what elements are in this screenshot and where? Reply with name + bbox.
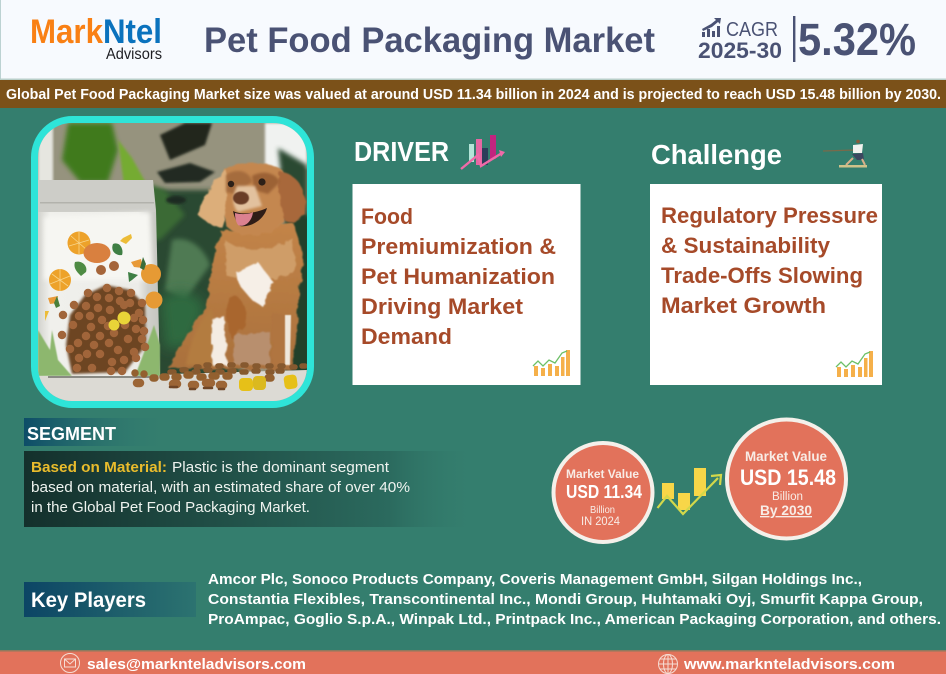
icon: email <box>60 654 80 672</box>
logo: MarkNtel Advisors: Advisors <box>106 46 162 63</box>
title: Pet Food Packaging Market <box>204 21 655 60</box>
CAGR block: 5.32% <box>798 14 916 65</box>
segment panel <box>24 451 480 527</box>
challenge text: Trade-Offs Slowing <box>661 263 863 288</box>
market value 2030 circle: USD 15.48 <box>740 465 836 490</box>
market value 2030 circle: Market Value <box>745 449 827 464</box>
market value 2030 circle <box>727 420 846 538</box>
summary band <box>0 80 946 108</box>
market value 2024 circle <box>554 443 652 542</box>
market value 2030 circle: By 2030 <box>760 503 812 518</box>
driver text: Driving Market <box>361 294 524 319</box>
logo: MarkNtel Advisors: MarkNtel <box>30 13 162 51</box>
key players list: ProAmpac, Goglio S.p.A., Winpak Ltd., Printpack Inc., American Packaging Corporation, and others. <box>208 612 941 628</box>
driver text: Premiumization & <box>361 234 556 259</box>
challenge text: Regulatory Pressure <box>661 203 878 228</box>
challenge text <box>661 203 878 318</box>
icon: tug of war figure <box>823 140 867 168</box>
key players list <box>208 572 941 628</box>
key players label <box>24 582 196 617</box>
key players list: Constantia Flexibles, Transcontinental Inc., Mondi Group, Huhtamaki Oyj, Smurfit Kappa Group, <box>208 592 923 608</box>
CAGR block: CAGR <box>726 19 778 41</box>
icon: growth bars <box>702 18 721 37</box>
CAGR block <box>698 14 916 65</box>
table and scattered kibble <box>38 365 307 401</box>
icon: driver growth bars with arrow <box>461 135 505 169</box>
segment panel: Based on Material: <box>31 459 167 476</box>
segment heading: SEGMENT <box>27 423 117 444</box>
challenge text: & Sustainability <box>661 233 831 258</box>
dog <box>168 162 306 370</box>
segment heading <box>24 418 174 446</box>
blurred room backdrop <box>38 123 311 401</box>
market value 2024 circle: IN 2024 <box>581 516 621 528</box>
footer bar: sales@marknteladvisors.com <box>87 656 306 673</box>
driver text: Food <box>361 204 413 229</box>
market value 2024 circle: USD 11.34 <box>566 482 642 502</box>
heading: DRIVER: DRIVER <box>354 136 449 167</box>
market value 2024 circle: Market Value <box>566 467 639 481</box>
market value 2024 circle: Billion <box>590 504 615 516</box>
driver text <box>361 204 556 349</box>
kibble inside bag <box>66 285 146 374</box>
segment panel: in the Global Pet Food Packaging Market. <box>31 499 310 516</box>
driver text: Pet Humanization <box>361 264 555 289</box>
market value 2030 circle: Billion <box>772 491 803 503</box>
panel: driver <box>352 184 580 385</box>
segment panel: Plastic is the dominant segment <box>172 459 390 476</box>
growth arrow with bars <box>658 468 721 514</box>
icon: small growth chart <box>836 351 873 377</box>
driver text: Demand <box>361 324 452 349</box>
summary band: Global Pet Food Packaging Market size was valued at around USD 11.34 billion in 2024 and is projected to reach USD 15.48 billion by 2030. <box>6 87 941 103</box>
pet food bag <box>38 180 162 376</box>
CAGR block: 2025-30 <box>698 38 782 63</box>
footer bar <box>0 650 946 674</box>
photo: dog beside pet food bag <box>34 120 311 404</box>
panel: challenge <box>650 184 882 385</box>
heading: Challenge: Challenge <box>651 139 782 170</box>
header bar <box>0 0 946 80</box>
icon: small growth chart <box>533 350 570 376</box>
icon: globe <box>658 654 678 674</box>
footer bar: www.marknteladvisors.com <box>683 656 895 673</box>
segment panel: based on material, with an estimated share of over 40% <box>31 479 410 496</box>
key players list: Amcor Plc, Sonoco Products Company, Coveris Management GmbH, Silgan Holdings Inc., <box>208 572 862 588</box>
challenge text: Market Growth <box>661 293 826 318</box>
key players label: Key Players <box>31 589 146 612</box>
